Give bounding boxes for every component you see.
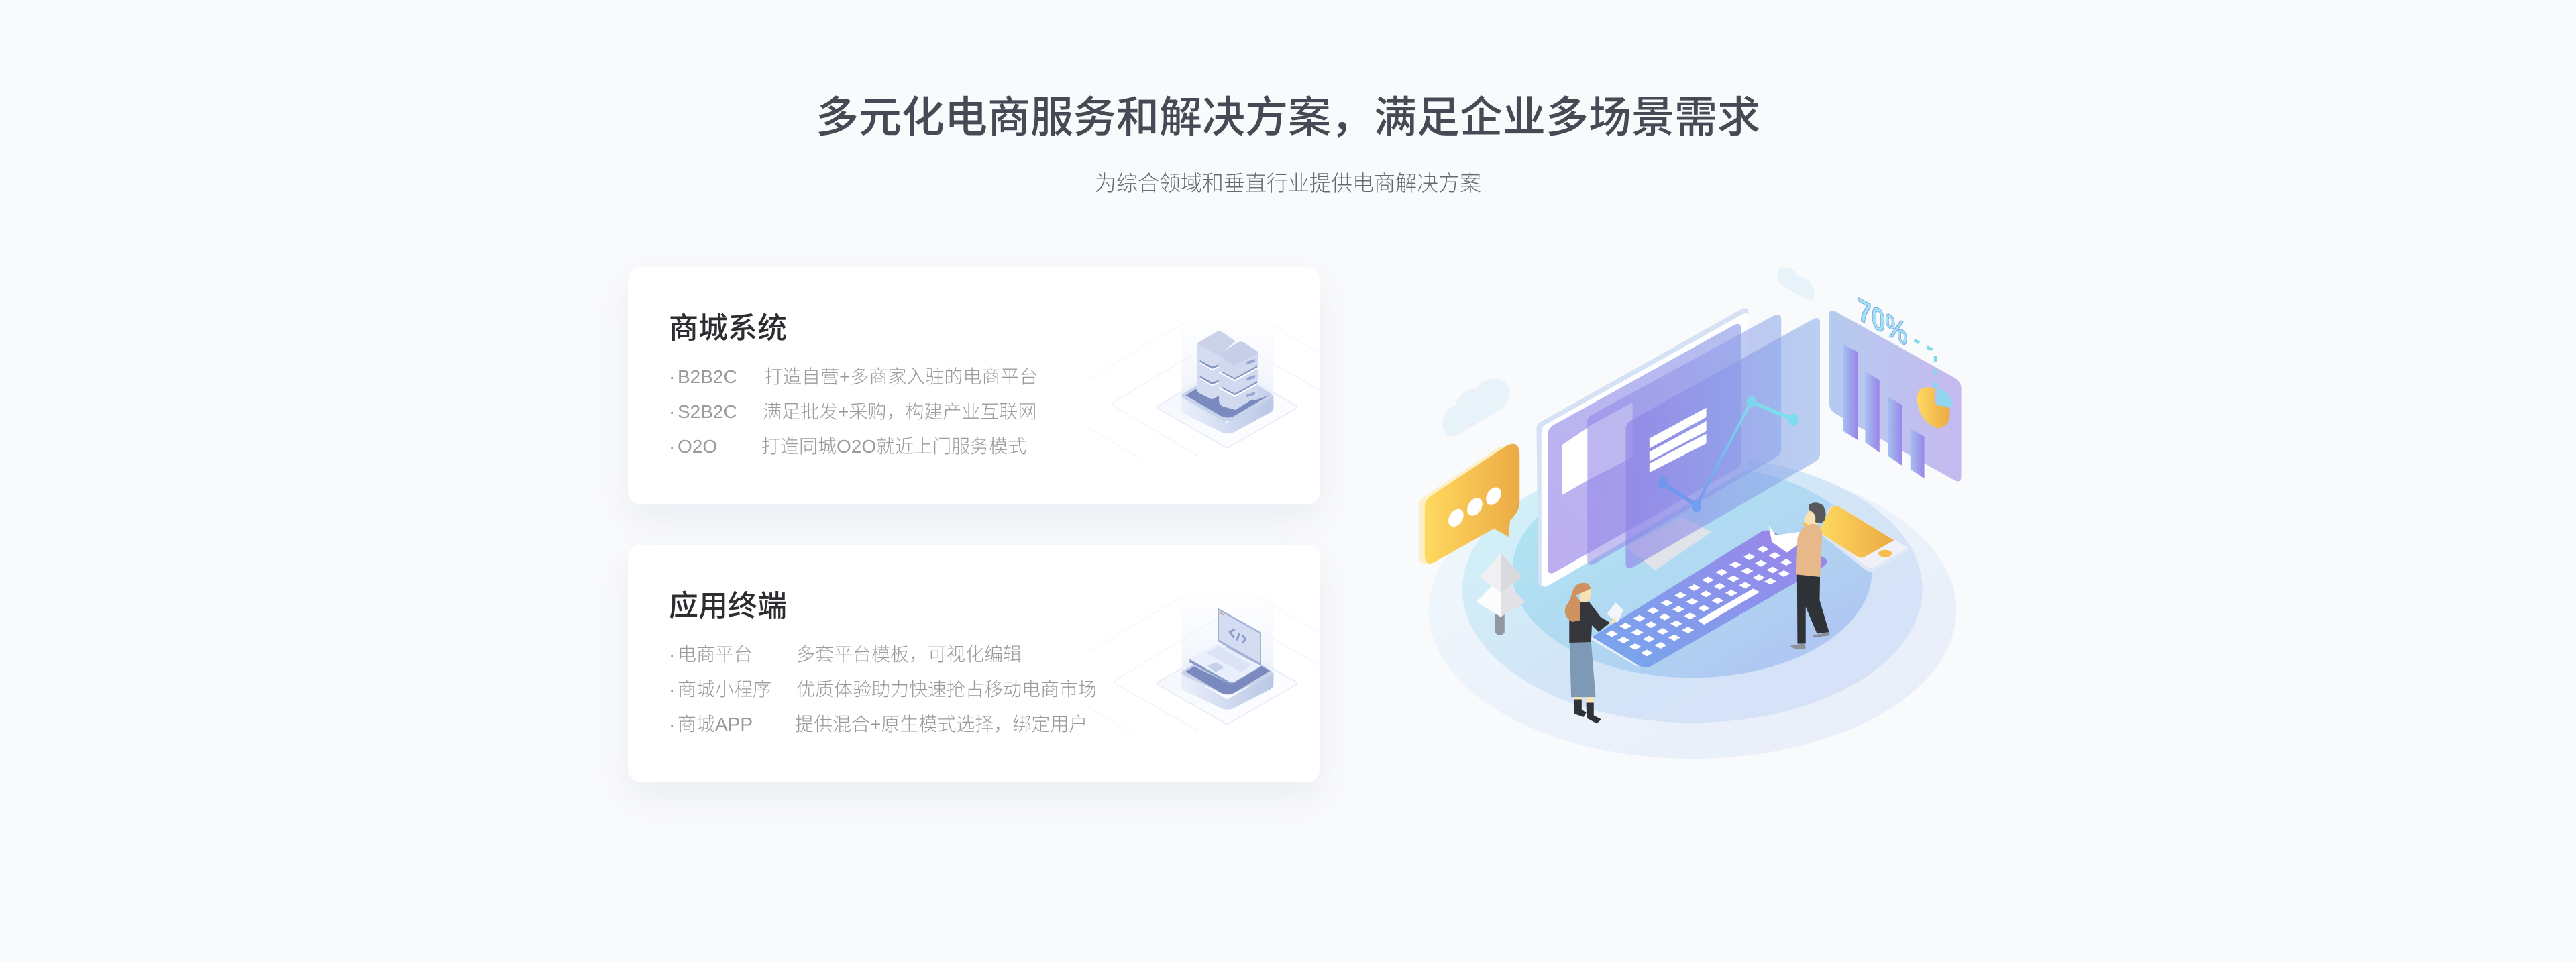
- description: O2O: 打造同城O2O就近上门服务模式: [761, 436, 1026, 457]
- space bar: [1698, 588, 1760, 625]
- bar chart: [1843, 345, 1925, 478]
- description: 商城APP: 提供混合+原生模式选择，绑定用户: [795, 714, 1087, 735]
- monitor screen: [1548, 324, 1741, 574]
- glass layer highlight: [1588, 403, 1633, 480]
- icon: top cloud: [1778, 268, 1815, 300]
- monitor frame: [1536, 309, 1748, 587]
- illustration: isometric e-commerce scene: [1418, 268, 1962, 759]
- person: woman: [1565, 583, 1623, 723]
- list item: 商城APP: 商城APP: [678, 714, 753, 735]
- list item: 商城APP: ·: [669, 714, 675, 735]
- percentage label: 70%: [1858, 290, 1907, 354]
- screen white block: [1562, 427, 1588, 495]
- list item: B2B2C: ·: [669, 366, 675, 387]
- panel: 应用终端: [628, 545, 1320, 782]
- list item: O2O: ·: [669, 436, 675, 457]
- laptop base: [1189, 643, 1261, 684]
- list item: S2B2C: ·: [669, 401, 675, 422]
- arm and tablet: [1769, 525, 1802, 553]
- panel: 商城系统: [628, 267, 1320, 504]
- icon: chat bubble: [1419, 444, 1519, 564]
- subtitle: 为综合领域和垂直行业提供电商解决方案: [1095, 171, 1481, 195]
- icon: laptop: [669, 590, 1320, 738]
- keyboard: [1591, 531, 1827, 667]
- description: 电商平台: 多套平台模板，可视化编辑: [796, 644, 1022, 665]
- list item: 商城小程序: 商城小程序: [678, 679, 771, 700]
- heading: 商城系统: [669, 312, 787, 345]
- description: 商城小程序: 优质体验助力快速抢占移动电商市场: [796, 679, 1097, 700]
- list item: O2O: O2O: [678, 436, 717, 457]
- list item: 电商平台: 电商平台: [678, 644, 753, 665]
- title: 多元化电商服务和解决方案，满足企业多场景需求: [816, 93, 1760, 142]
- keys: [1606, 546, 1792, 656]
- monitor stand: [1625, 517, 1711, 570]
- screen text lines: [1650, 408, 1707, 472]
- icon: tree: [1477, 553, 1525, 635]
- heading: 应用终端: [669, 590, 787, 623]
- pie chart: [1917, 387, 1953, 429]
- code symbol: [1230, 629, 1246, 643]
- dashed connector: [1914, 340, 1935, 388]
- icon: left cloud: [1442, 378, 1509, 436]
- glass layer three: [1625, 318, 1820, 568]
- chart panel: [1829, 290, 1962, 481]
- right server stack: [1219, 341, 1258, 410]
- list item: 商城小程序: ·: [669, 679, 675, 700]
- phone: [1819, 506, 1911, 572]
- line chart: [1658, 396, 1799, 512]
- list item: B2B2C: B2B2C: [678, 366, 737, 387]
- glass layer two: [1587, 315, 1781, 565]
- left server stack: [1197, 331, 1236, 399]
- typing dots: [1446, 485, 1504, 529]
- description: S2B2C: 满足批发+采购，构建产业互联网: [763, 401, 1036, 422]
- icon: server stack: [669, 312, 1320, 459]
- outer platform ring: [1428, 462, 1956, 759]
- list item: S2B2C: S2B2C: [678, 401, 737, 422]
- middle platform ring: [1462, 456, 1923, 723]
- person: man: [1769, 502, 1830, 649]
- inner platform ring: [1512, 465, 1872, 678]
- list item: 电商平台: ·: [669, 644, 675, 665]
- description: B2B2C: 打造自营+多商家入驻的电商平台: [764, 366, 1038, 387]
- laptop screen: [1218, 608, 1261, 666]
